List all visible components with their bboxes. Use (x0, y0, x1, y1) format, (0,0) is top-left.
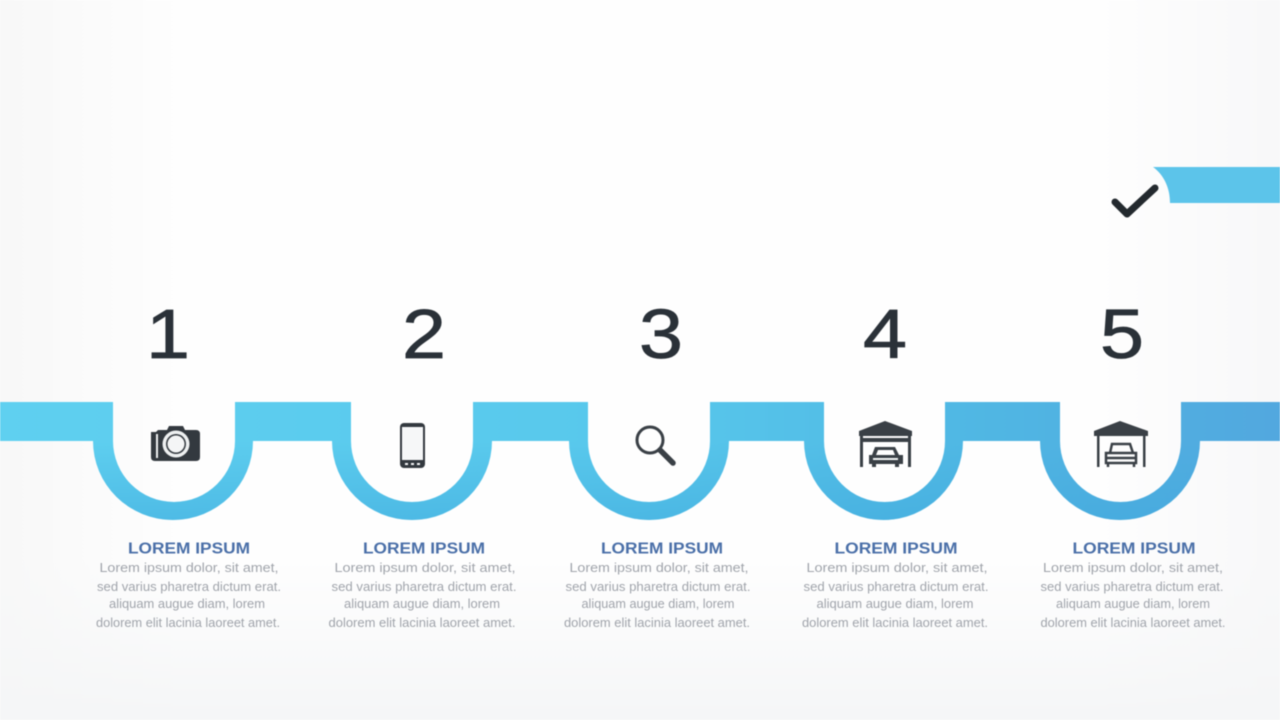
description: dolorem elit lacinia laoreet amet. (96, 616, 280, 630)
description (96, 561, 281, 630)
step 1 (96, 295, 281, 630)
description (1040, 561, 1226, 630)
heading: LOREM IPSUM (128, 540, 250, 558)
number 3: 3 (639, 295, 683, 373)
number 5: 5 (1100, 295, 1144, 373)
number 1: 1 (146, 295, 190, 373)
description (564, 561, 750, 630)
heading: LOREM IPSUM (363, 540, 485, 558)
description: sed varius pharetra dictum erat. (332, 580, 516, 594)
icon: camera (151, 426, 200, 461)
description: aliquam augue diam, lorem (582, 597, 734, 611)
description: aliquam augue diam, lorem (344, 597, 500, 611)
description: dolorem elit lacinia laoreet amet. (1040, 616, 1226, 630)
description: sed varius pharetra dictum erat. (566, 580, 750, 594)
icon: magnifier (637, 427, 673, 463)
description: aliquam augue diam, lorem (816, 597, 974, 611)
top-right ribbon (1153, 167, 1280, 203)
description: dolorem elit lacinia laoreet amet. (564, 616, 750, 630)
step 4 (802, 295, 988, 630)
description: dolorem elit lacinia laoreet amet. (328, 616, 516, 630)
icon: check mark (1115, 188, 1155, 214)
step 2 (328, 295, 516, 630)
description: sed varius pharetra dictum erat. (804, 580, 988, 594)
description: sed varius pharetra dictum erat. (97, 580, 281, 594)
description: Lorem ipsum dolor, sit amet, (806, 561, 988, 575)
description: Lorem ipsum dolor, sit amet, (570, 561, 748, 575)
heading: LOREM IPSUM (1072, 540, 1196, 558)
icon: carport with car (1094, 421, 1148, 467)
icon: garage with car (859, 421, 912, 467)
description: Lorem ipsum dolor, sit amet, (100, 561, 278, 575)
number 4: 4 (863, 295, 907, 373)
description: sed varius pharetra dictum erat. (1040, 580, 1224, 594)
step 3 (564, 295, 750, 630)
description: Lorem ipsum dolor, sit amet, (1043, 561, 1223, 575)
icon: phone (400, 423, 425, 468)
wavy timeline band (0, 402, 1280, 520)
description (802, 561, 988, 630)
heading: LOREM IPSUM (601, 540, 723, 558)
description: Lorem ipsum dolor, sit amet, (334, 561, 516, 575)
heading: LOREM IPSUM (834, 540, 958, 558)
number 2: 2 (402, 295, 446, 373)
description: aliquam augue diam, lorem (109, 597, 265, 611)
description: aliquam augue diam, lorem (1056, 597, 1210, 611)
description: dolorem elit lacinia laoreet amet. (802, 616, 988, 630)
step 5 (1040, 295, 1226, 630)
description (328, 561, 516, 630)
